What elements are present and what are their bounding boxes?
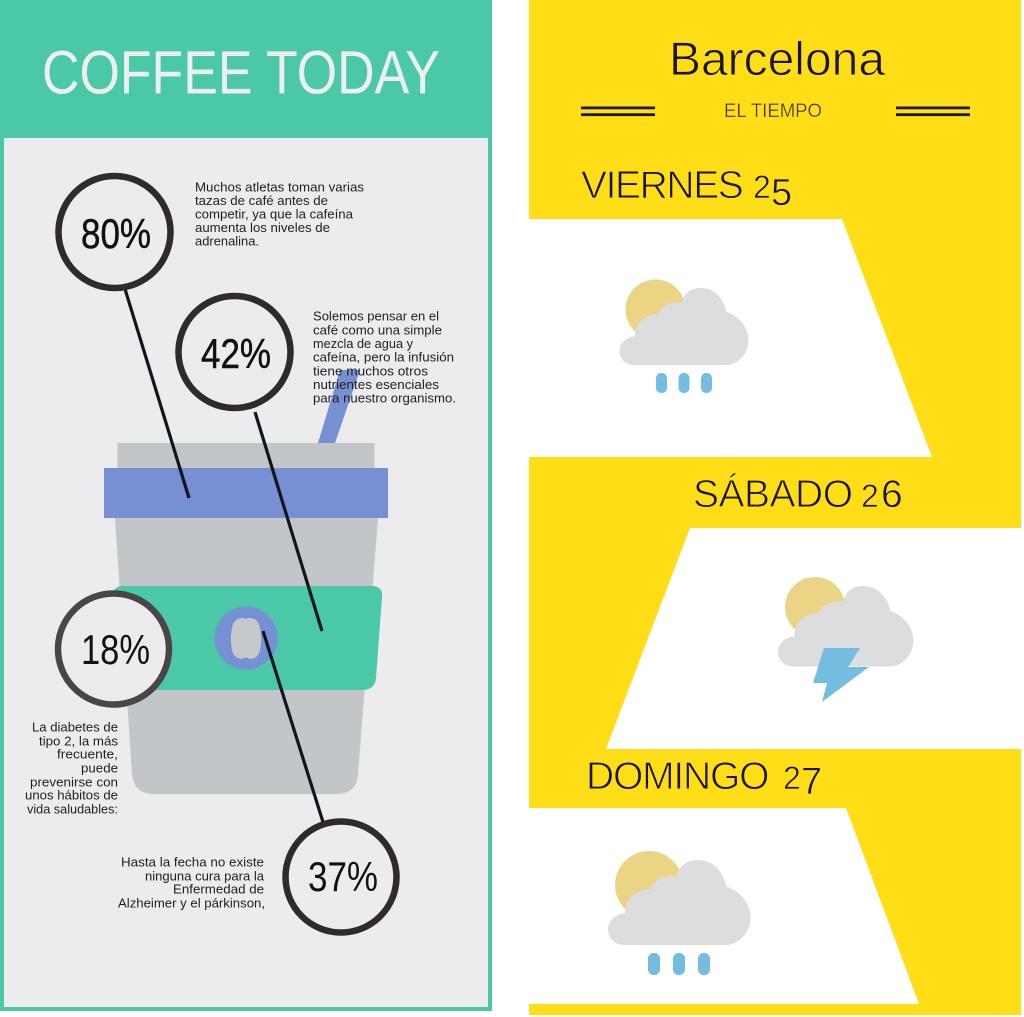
day label: 7 bbox=[801, 761, 822, 803]
double rule right bbox=[896, 106, 970, 116]
text: nutrients: cafeína, pero la infusión bbox=[313, 351, 454, 365]
circle bbox=[178, 296, 290, 408]
text: nutrients: para nuestro organismo. bbox=[313, 392, 456, 406]
text: diabetes bbox=[25, 721, 118, 817]
rain drops bbox=[648, 953, 710, 975]
text: athletes: adrenalina. bbox=[195, 235, 259, 249]
day label: DOMINGO bbox=[586, 755, 768, 798]
text: alzheimer: ninguna cura para la bbox=[145, 870, 264, 884]
value: 37% bbox=[308, 853, 378, 900]
icon: sun, cloud and rain bbox=[608, 851, 751, 975]
day card bbox=[606, 528, 1022, 749]
day: sabado bbox=[606, 473, 1022, 749]
day: domingo bbox=[529, 755, 919, 1004]
cup body bbox=[115, 518, 378, 794]
text: nutrients: mezcla de agua y bbox=[313, 337, 414, 351]
line: 37% bbox=[263, 631, 323, 822]
day card bbox=[529, 808, 919, 1004]
text: athletes bbox=[195, 181, 364, 249]
text: nutrients: nutrientes esenciales bbox=[313, 378, 439, 392]
day label: SÁBADO bbox=[693, 473, 853, 516]
cup straw bbox=[318, 370, 360, 443]
line: 80% bbox=[125, 289, 189, 498]
day label: 2 bbox=[861, 478, 879, 514]
connector lines bbox=[125, 289, 323, 822]
sun bbox=[785, 577, 845, 637]
text: diabetes: frecuente, bbox=[57, 748, 118, 762]
panel background bbox=[0, 0, 492, 1011]
cloud bbox=[608, 860, 751, 945]
cloud bbox=[778, 586, 913, 666]
value: 80% bbox=[81, 210, 151, 257]
day: viernes bbox=[529, 164, 932, 457]
value: 42% bbox=[201, 330, 271, 377]
day label: 6 bbox=[881, 473, 903, 516]
day card bbox=[529, 219, 932, 457]
coffee bean bbox=[231, 618, 261, 659]
sun bbox=[615, 851, 683, 919]
text: alzheimer: Enfermedad de bbox=[173, 883, 264, 897]
sleeve badge bbox=[214, 606, 278, 670]
sun bbox=[626, 280, 686, 340]
cloud bbox=[620, 288, 748, 365]
content area bbox=[4, 138, 488, 1007]
text: diabetes: prevenirse con bbox=[30, 776, 118, 790]
lightning bolt bbox=[813, 648, 869, 702]
text: nutrients: tiene muchos otros bbox=[313, 365, 428, 379]
day label: 2 bbox=[783, 760, 801, 796]
illustration: coffee cup bbox=[104, 370, 388, 794]
double rule left bbox=[581, 106, 655, 116]
stat: 42% bbox=[178, 296, 290, 408]
text: athletes: competir, ya que la cafeína bbox=[195, 208, 353, 222]
stat: 80% bbox=[58, 176, 170, 288]
text: diabetes: tipo 2, la más bbox=[39, 735, 118, 749]
text: nutrients: Solemos pensar en el bbox=[313, 310, 439, 324]
cup lid top bbox=[118, 443, 374, 469]
circle bbox=[58, 594, 169, 704]
heading: Barcelona: Barcelona bbox=[669, 32, 886, 85]
text: athletes: tazas de café antes de bbox=[195, 194, 328, 208]
panel: coffee today bbox=[0, 0, 492, 1011]
icon: sun, cloud and lightning bbox=[778, 577, 913, 702]
circle bbox=[58, 176, 170, 288]
text: nutrients bbox=[313, 310, 456, 406]
text: athletes: aumenta los niveles de bbox=[195, 221, 330, 235]
line: 42% bbox=[255, 412, 322, 631]
text: nutrients: café como una simple bbox=[313, 324, 442, 338]
day label: 2 bbox=[753, 169, 771, 205]
text: alzheimer: Hasta la fecha no existe bbox=[121, 856, 264, 870]
text: alzheimer: Alzheimer y el párkinson, bbox=[118, 897, 265, 911]
text: diabetes: La diabetes de bbox=[32, 721, 118, 735]
subheading: el tiempo: EL TIEMPO bbox=[724, 101, 822, 122]
cup sleeve bbox=[113, 586, 382, 690]
text: diabetes: puede bbox=[81, 762, 118, 776]
panel: weather bbox=[529, 0, 1022, 1015]
value: 18% bbox=[81, 626, 150, 673]
text: diabetes: vida saludables: bbox=[27, 803, 118, 817]
title: COFFEE TODAY bbox=[42, 38, 440, 107]
stat: 18% bbox=[58, 594, 169, 704]
panel background bbox=[529, 0, 1021, 1015]
icon: sun, cloud and rain bbox=[620, 280, 748, 393]
text: alzheimer bbox=[118, 856, 265, 911]
rain drops bbox=[656, 373, 712, 393]
circle bbox=[286, 822, 396, 932]
day label: 5 bbox=[771, 172, 792, 214]
text: diabetes: unos hábitos de bbox=[25, 789, 118, 803]
stat: 37% bbox=[286, 822, 396, 932]
cup lid band bbox=[104, 468, 388, 518]
text: athletes: Muchos atletas toman varias bbox=[195, 181, 364, 195]
day label: VIERNES bbox=[581, 164, 743, 207]
